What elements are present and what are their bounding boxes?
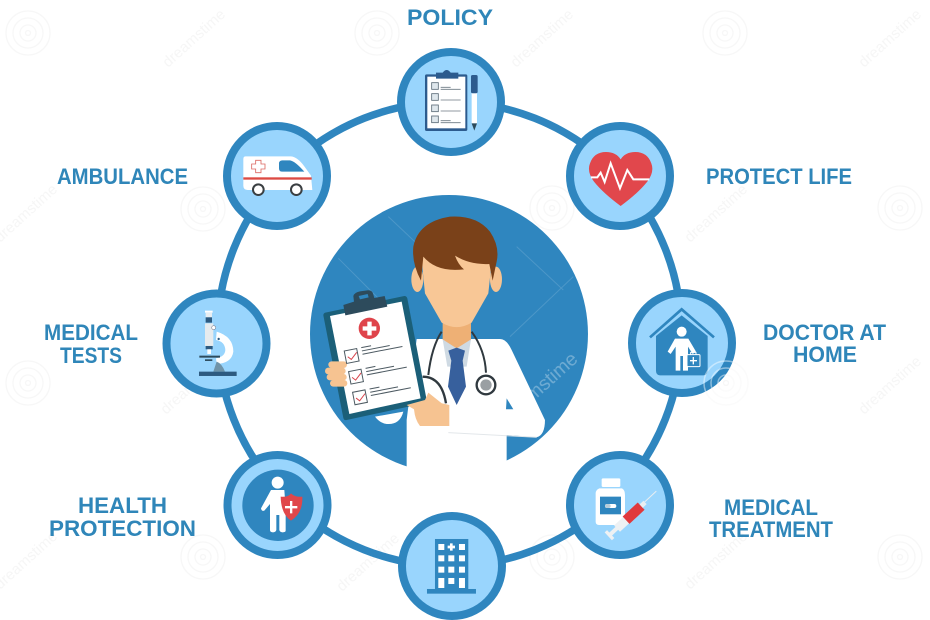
text: dreamstime — [159, 6, 229, 71]
white sleeve under clipboard — [375, 412, 403, 424]
white coat — [407, 339, 545, 480]
label: health protection: HEALTH — [78, 493, 167, 518]
right hand — [407, 393, 449, 426]
text: dreamstime — [855, 6, 925, 71]
icon: house with doctor — [650, 309, 714, 375]
central doctor illustration: eamstime — [506, 349, 582, 420]
icon: person with shield — [242, 470, 314, 541]
label: doctor at home: HOME — [793, 342, 857, 367]
label: medical treatment: MEDICAL — [724, 495, 818, 520]
icon: ambulance — [243, 156, 312, 195]
icon: heart with pulse — [589, 152, 652, 206]
node: medical treatment — [570, 455, 670, 555]
paper — [330, 302, 421, 414]
label: policy: POLICY — [407, 5, 493, 30]
node: doctor at home — [632, 293, 748, 405]
node: hospital — [402, 516, 502, 616]
text: dreamstime — [681, 181, 751, 246]
node: protect life — [570, 126, 670, 226]
node: policy — [401, 52, 501, 152]
text: dreamstime — [333, 530, 403, 595]
clipboard — [323, 296, 427, 420]
label: protect life: PROTECT LIFE — [706, 164, 852, 189]
icon: hospital building — [427, 539, 476, 594]
left hand fingers — [325, 361, 347, 387]
node: medical tests — [166, 294, 266, 394]
label: medical treatment: TREATMENT — [709, 517, 834, 542]
ears — [411, 267, 423, 292]
central doctor illustration — [310, 195, 588, 480]
text: dreamstime — [507, 6, 577, 71]
connecting ring — [218, 102, 682, 566]
clip — [343, 290, 387, 315]
label: medical tests: MEDICAL — [44, 320, 138, 345]
stethoscope — [423, 332, 495, 403]
checklist rows — [344, 340, 412, 405]
neck and collar — [443, 322, 471, 349]
node: health protection — [228, 455, 328, 555]
text: dreamstime — [681, 528, 751, 593]
tie — [448, 348, 466, 405]
icon: microscope — [199, 311, 237, 376]
label: doctor at home — [763, 320, 887, 367]
hair — [413, 217, 497, 281]
label: medical treatment — [709, 495, 834, 542]
text: dreamstime — [855, 353, 925, 418]
label: health protection: PROTECTION — [49, 516, 196, 541]
label: doctor at home: DOCTOR AT — [763, 320, 887, 345]
red medical cross badge — [359, 318, 380, 339]
label: health protection — [49, 493, 196, 541]
label: medical tests: TESTS — [60, 343, 122, 368]
icon: clipboard and pen — [425, 70, 478, 131]
node: ambulance — [227, 126, 327, 226]
text: dreamstime — [157, 353, 227, 418]
blue backdrop circle — [310, 195, 588, 473]
icon: pill bottle and syringe — [596, 478, 660, 540]
label: medical tests — [44, 320, 138, 368]
label: ambulance: AMBULANCE — [57, 164, 188, 189]
face — [421, 233, 493, 327]
